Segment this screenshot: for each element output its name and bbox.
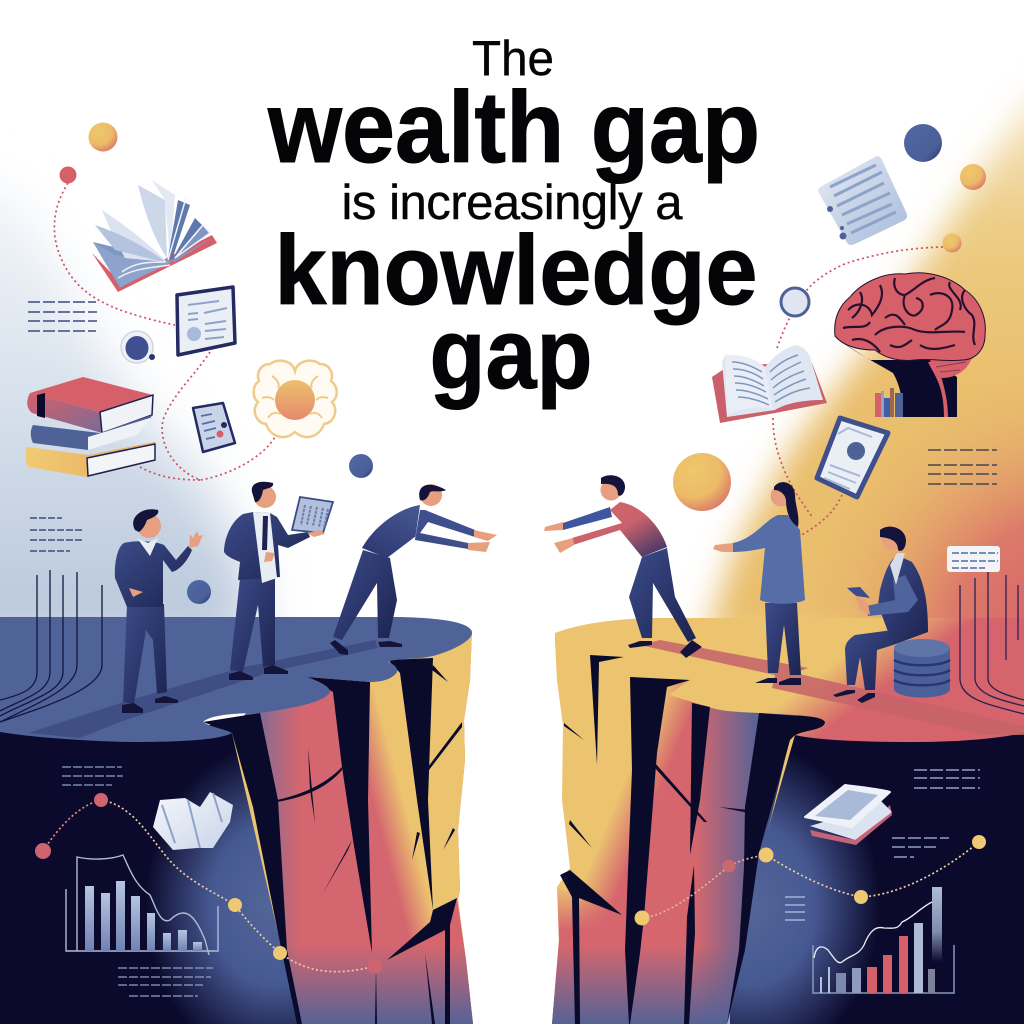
title: knowledge (274, 215, 758, 325)
title (267, 32, 760, 410)
left vertical lines decoration (0, 570, 102, 722)
right plateau shadow stripe (640, 640, 1024, 735)
right cliff face (552, 640, 800, 1024)
right chasm base (720, 715, 1024, 1024)
title: The (472, 32, 554, 86)
right plateau top (555, 618, 1024, 742)
person 1: left man with sweater (115, 509, 203, 713)
icon: tablet right (817, 418, 888, 497)
right line chart with dots (634, 835, 986, 926)
text lines right upper (928, 450, 997, 484)
right cracks (560, 655, 825, 1024)
icon: stacked books (26, 377, 155, 477)
title: gap (430, 298, 592, 410)
icon: glowing brain sun (254, 361, 337, 437)
right vertical lines decoration (960, 570, 1024, 714)
title: wealth gap (267, 72, 760, 184)
person 2: man in suit with tablet (224, 482, 333, 680)
title: is increasingly a (342, 176, 683, 230)
text lines bottom right (892, 770, 980, 857)
person 5: woman standing (713, 482, 805, 685)
person 6: seated man on coins (833, 527, 950, 703)
text lines left upper (28, 302, 97, 331)
icon: open book top left (92, 180, 217, 292)
left cliff face (232, 630, 473, 1024)
icon: open book right (712, 345, 827, 423)
text lines left lower (30, 518, 82, 551)
text lines bottom left (62, 767, 213, 996)
dotted connector paths (54, 183, 943, 537)
left line chart with dots (35, 793, 382, 974)
left plateau shadow stripe (28, 640, 378, 738)
icon: small tablet (193, 403, 235, 452)
left cracks (203, 658, 462, 1024)
stacked tablet icon (805, 785, 892, 845)
list lines bottom right (785, 897, 805, 920)
icon: document right top (818, 156, 907, 245)
right decorative circles (673, 124, 986, 511)
icon: brain (835, 273, 985, 417)
icon: small eye blob (121, 331, 155, 363)
left chasm base (0, 725, 330, 1024)
left plateau top (0, 617, 472, 742)
right bar chart (813, 887, 954, 993)
left bar chart (66, 855, 218, 955)
icon: small right card (947, 546, 1000, 572)
person 3: man reaching across the gap (330, 484, 497, 655)
crumpled paper (153, 792, 233, 850)
icon: tablet card (177, 287, 235, 355)
left decorative circles (60, 122, 373, 604)
person 4: right reaching person (544, 475, 702, 658)
